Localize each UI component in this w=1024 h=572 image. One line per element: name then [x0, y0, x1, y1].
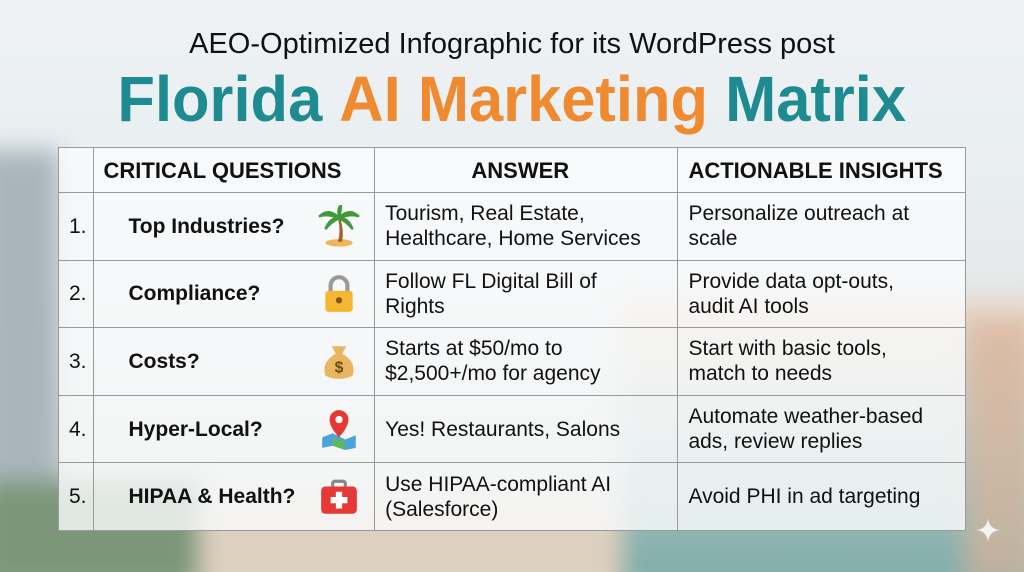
table: Personalize outreach at scale	[688, 202, 909, 250]
table: Automate weather-based ads, review replies	[688, 405, 923, 453]
table: Yes! Restaurants, Salons	[385, 418, 620, 441]
title: Florida Matrix	[118, 63, 906, 135]
icon: map pin	[322, 410, 356, 450]
table: Top Industries?	[129, 215, 284, 238]
icon: lock	[325, 275, 353, 312]
table: 2.	[69, 282, 87, 305]
icon: money bag: $	[335, 360, 344, 377]
table: Follow FL Digital Bill of Rights	[385, 270, 597, 318]
table: Costs?	[129, 350, 200, 373]
table	[58, 147, 966, 531]
icon: sparkle	[976, 518, 1000, 542]
table: Hyper-Local?	[129, 418, 263, 441]
table: ANSWER	[471, 158, 569, 182]
table: Avoid PHI in ad targeting	[688, 485, 920, 508]
table: Starts at $50/mo to $2,500+/mo for agency	[385, 337, 601, 385]
table: 1.	[69, 215, 87, 238]
table: Compliance?	[129, 282, 260, 305]
subtitle: AEO-Optimized Infographic for its WordPress post	[189, 28, 835, 60]
icon: palm tree	[318, 205, 360, 246]
table: 5.	[69, 485, 87, 508]
table: Provide data opt-outs, audit AI tools	[688, 270, 894, 318]
title: AI Marketing	[340, 63, 708, 135]
table: HIPAA & Health?	[129, 485, 295, 508]
table: CRITICAL QUESTIONS	[104, 158, 341, 182]
table: 4.	[69, 418, 87, 441]
table: Start with basic tools, match to needs	[688, 337, 887, 385]
table: Tourism, Real Estate, Healthcare, Home Services	[385, 202, 641, 250]
table: Use HIPAA-compliant AI (Salesforce)	[385, 473, 611, 521]
table: 3.	[69, 350, 87, 373]
icon: money bag	[324, 346, 354, 379]
table: ACTIONABLE INSIGHTS	[688, 158, 943, 182]
icon: first aid kit	[321, 480, 357, 514]
